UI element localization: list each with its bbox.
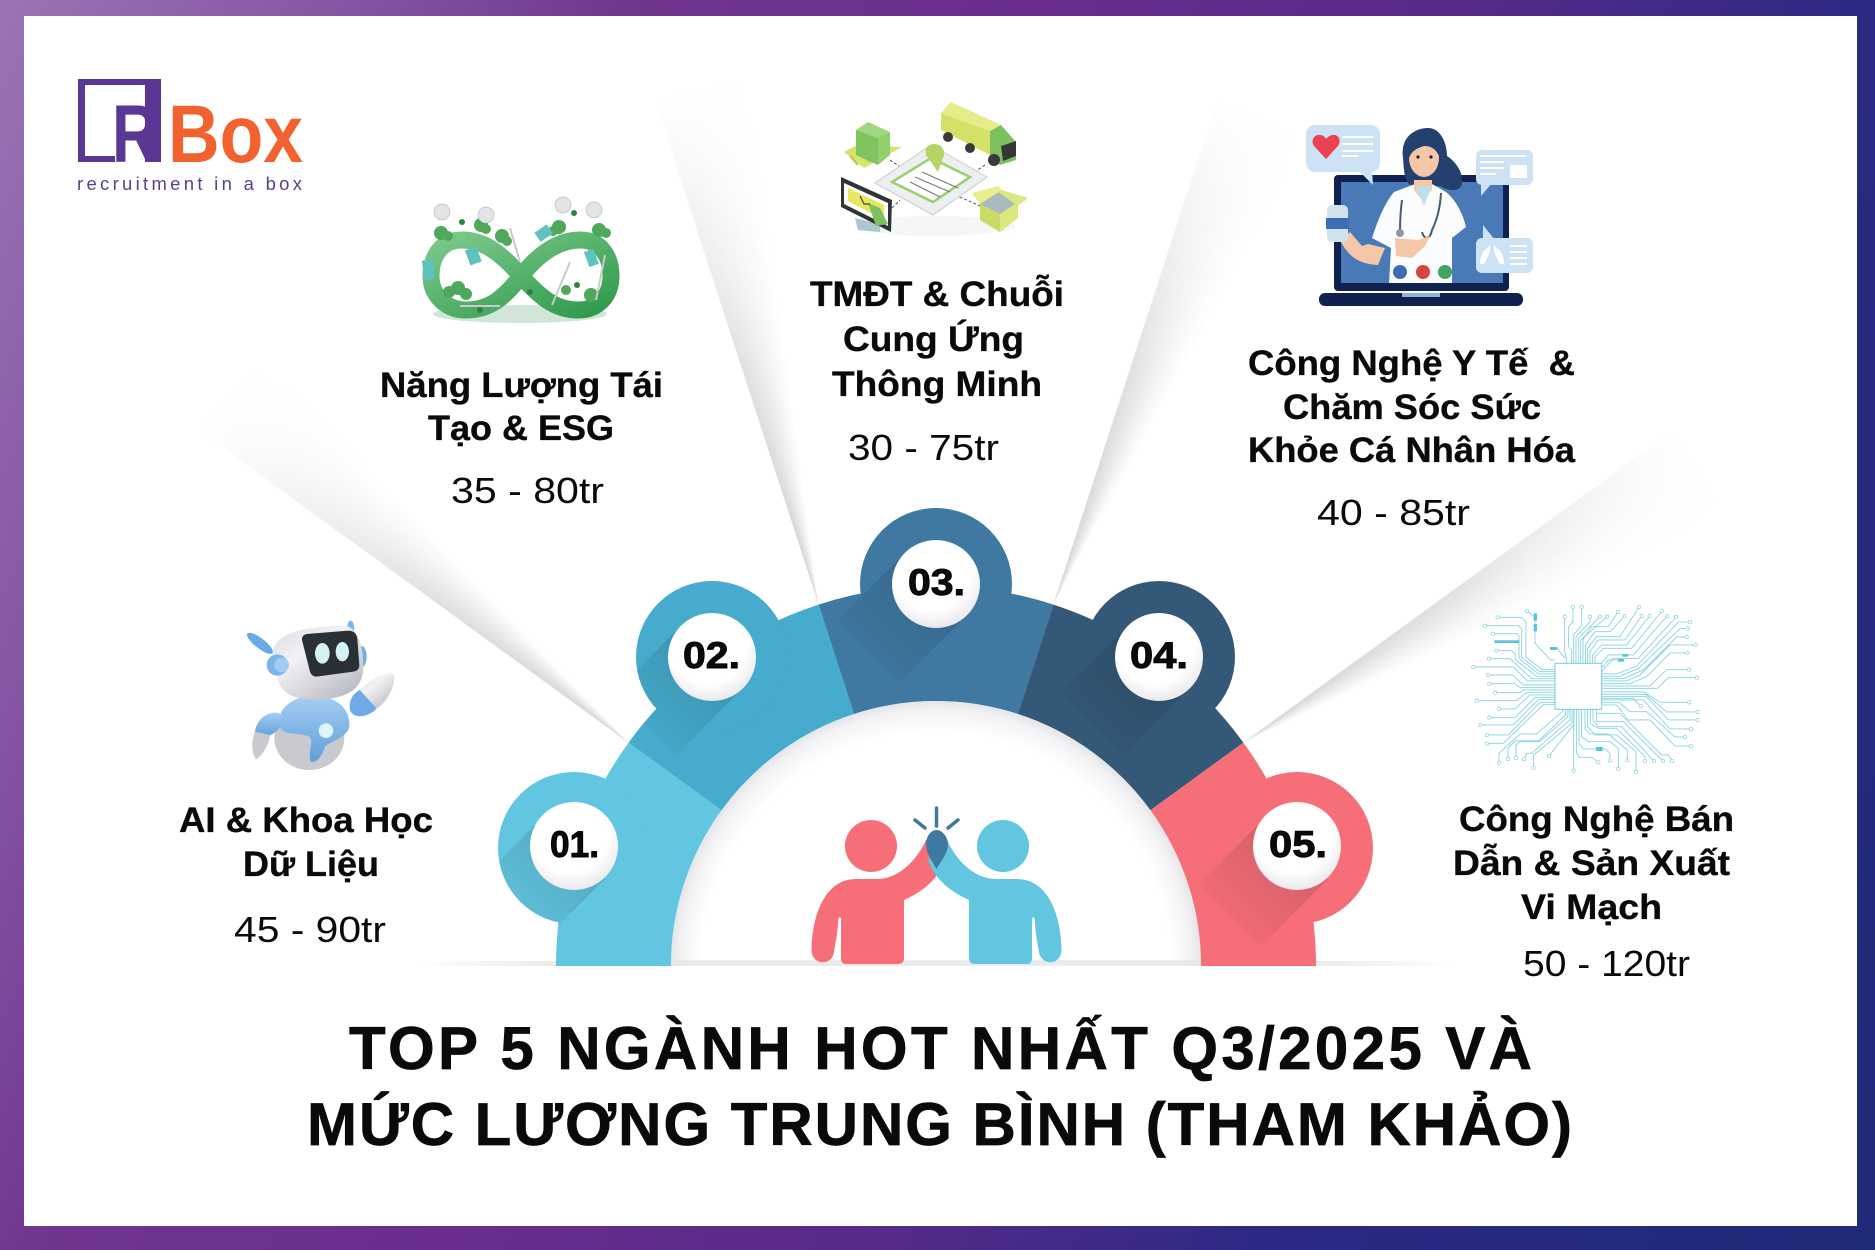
open box [972, 186, 1028, 232]
rays behind the arch [196, 66, 1733, 820]
inner arch [671, 701, 1201, 966]
segment 5 [1150, 743, 1373, 966]
label 05: Công Nghệ Bán [1459, 800, 1734, 839]
number 02 [668, 613, 756, 701]
logo: recruitment in a box [77, 173, 303, 194]
label 01: 45 - 90tr [234, 909, 386, 950]
label 05: 50 - 120tr [1523, 943, 1690, 984]
segment 4 [1018, 581, 1243, 810]
segment 2 [629, 581, 854, 810]
logo [77, 79, 303, 194]
label 04: Chăm Sóc Sức [1283, 388, 1541, 427]
label 05: Vi Mạch [1521, 888, 1662, 927]
label 04: Công Nghệ Y Tế & [1248, 344, 1575, 383]
long shadows [476, 553, 1328, 946]
ground line over arch [671, 960, 1201, 966]
label 03: 30 - 75tr [848, 427, 999, 468]
segment 3 [819, 508, 1053, 714]
label 01 [179, 801, 433, 950]
title: MỨC LƯƠNG TRUNG BÌNH (THAM KHẢO) [307, 1091, 1572, 1158]
label 04: 40 - 85tr [1317, 492, 1470, 533]
ray 2 [653, 66, 910, 605]
label 03: Thông Minh [832, 365, 1042, 404]
segment 1 [498, 743, 722, 966]
logo: Box [168, 89, 303, 180]
ray 3 [1053, 96, 1310, 634]
monitor [841, 177, 892, 232]
label 01: Dữ Liệu [243, 845, 379, 884]
bubble heart [1306, 125, 1380, 185]
number 03: 03. [908, 562, 965, 603]
icon: high five [812, 808, 1062, 964]
label 02: Năng Lượng Tái [380, 366, 663, 405]
ray 1 [196, 350, 685, 743]
label 02 [380, 366, 663, 511]
label 04 [1248, 344, 1576, 533]
label 01: AI & Khoa Học [179, 801, 433, 840]
pallet and box [844, 122, 902, 168]
label 03: Cung Ứng [843, 319, 1024, 359]
icon: semiconductor chip [1472, 605, 1699, 774]
number 05: 05. [1269, 824, 1327, 865]
truck [941, 102, 1016, 166]
number 04 [1115, 613, 1203, 701]
label 04: Khỏe Cá Nhân Hóa [1248, 431, 1576, 470]
label 02: Tạo & ESG [428, 409, 614, 448]
number 04: 04. [1130, 635, 1188, 676]
icon: robot [244, 621, 394, 770]
label 02: 35 - 80tr [451, 470, 604, 511]
icon: renewable infinity [422, 197, 611, 323]
semicircle chart [476, 508, 1373, 966]
label 05 [1453, 800, 1734, 984]
ray 4 [1243, 428, 1733, 820]
logo: R [112, 89, 158, 180]
label 05: Dẫn & Sản Xuất [1453, 843, 1730, 883]
number 02: 02. [683, 635, 740, 676]
bubble lungs [1476, 225, 1533, 273]
number 03 [892, 540, 980, 628]
title: TOP 5 NGÀNH HOT NHẤT Q3/2025 VÀ [349, 1015, 1532, 1082]
label 03 [810, 274, 1064, 468]
icon: telehealth doctor [1306, 125, 1533, 306]
number 05 [1253, 802, 1341, 890]
bubble x-ray [1476, 150, 1533, 196]
title [307, 1015, 1572, 1158]
label 03: TMĐT & Chuỗi [810, 274, 1064, 314]
icon: logistics [841, 102, 1028, 236]
number 01: 01. [550, 824, 599, 865]
doctor [1326, 128, 1466, 283]
number 01 [530, 802, 618, 890]
ground shadow line [415, 961, 1455, 966]
paper [875, 145, 987, 215]
